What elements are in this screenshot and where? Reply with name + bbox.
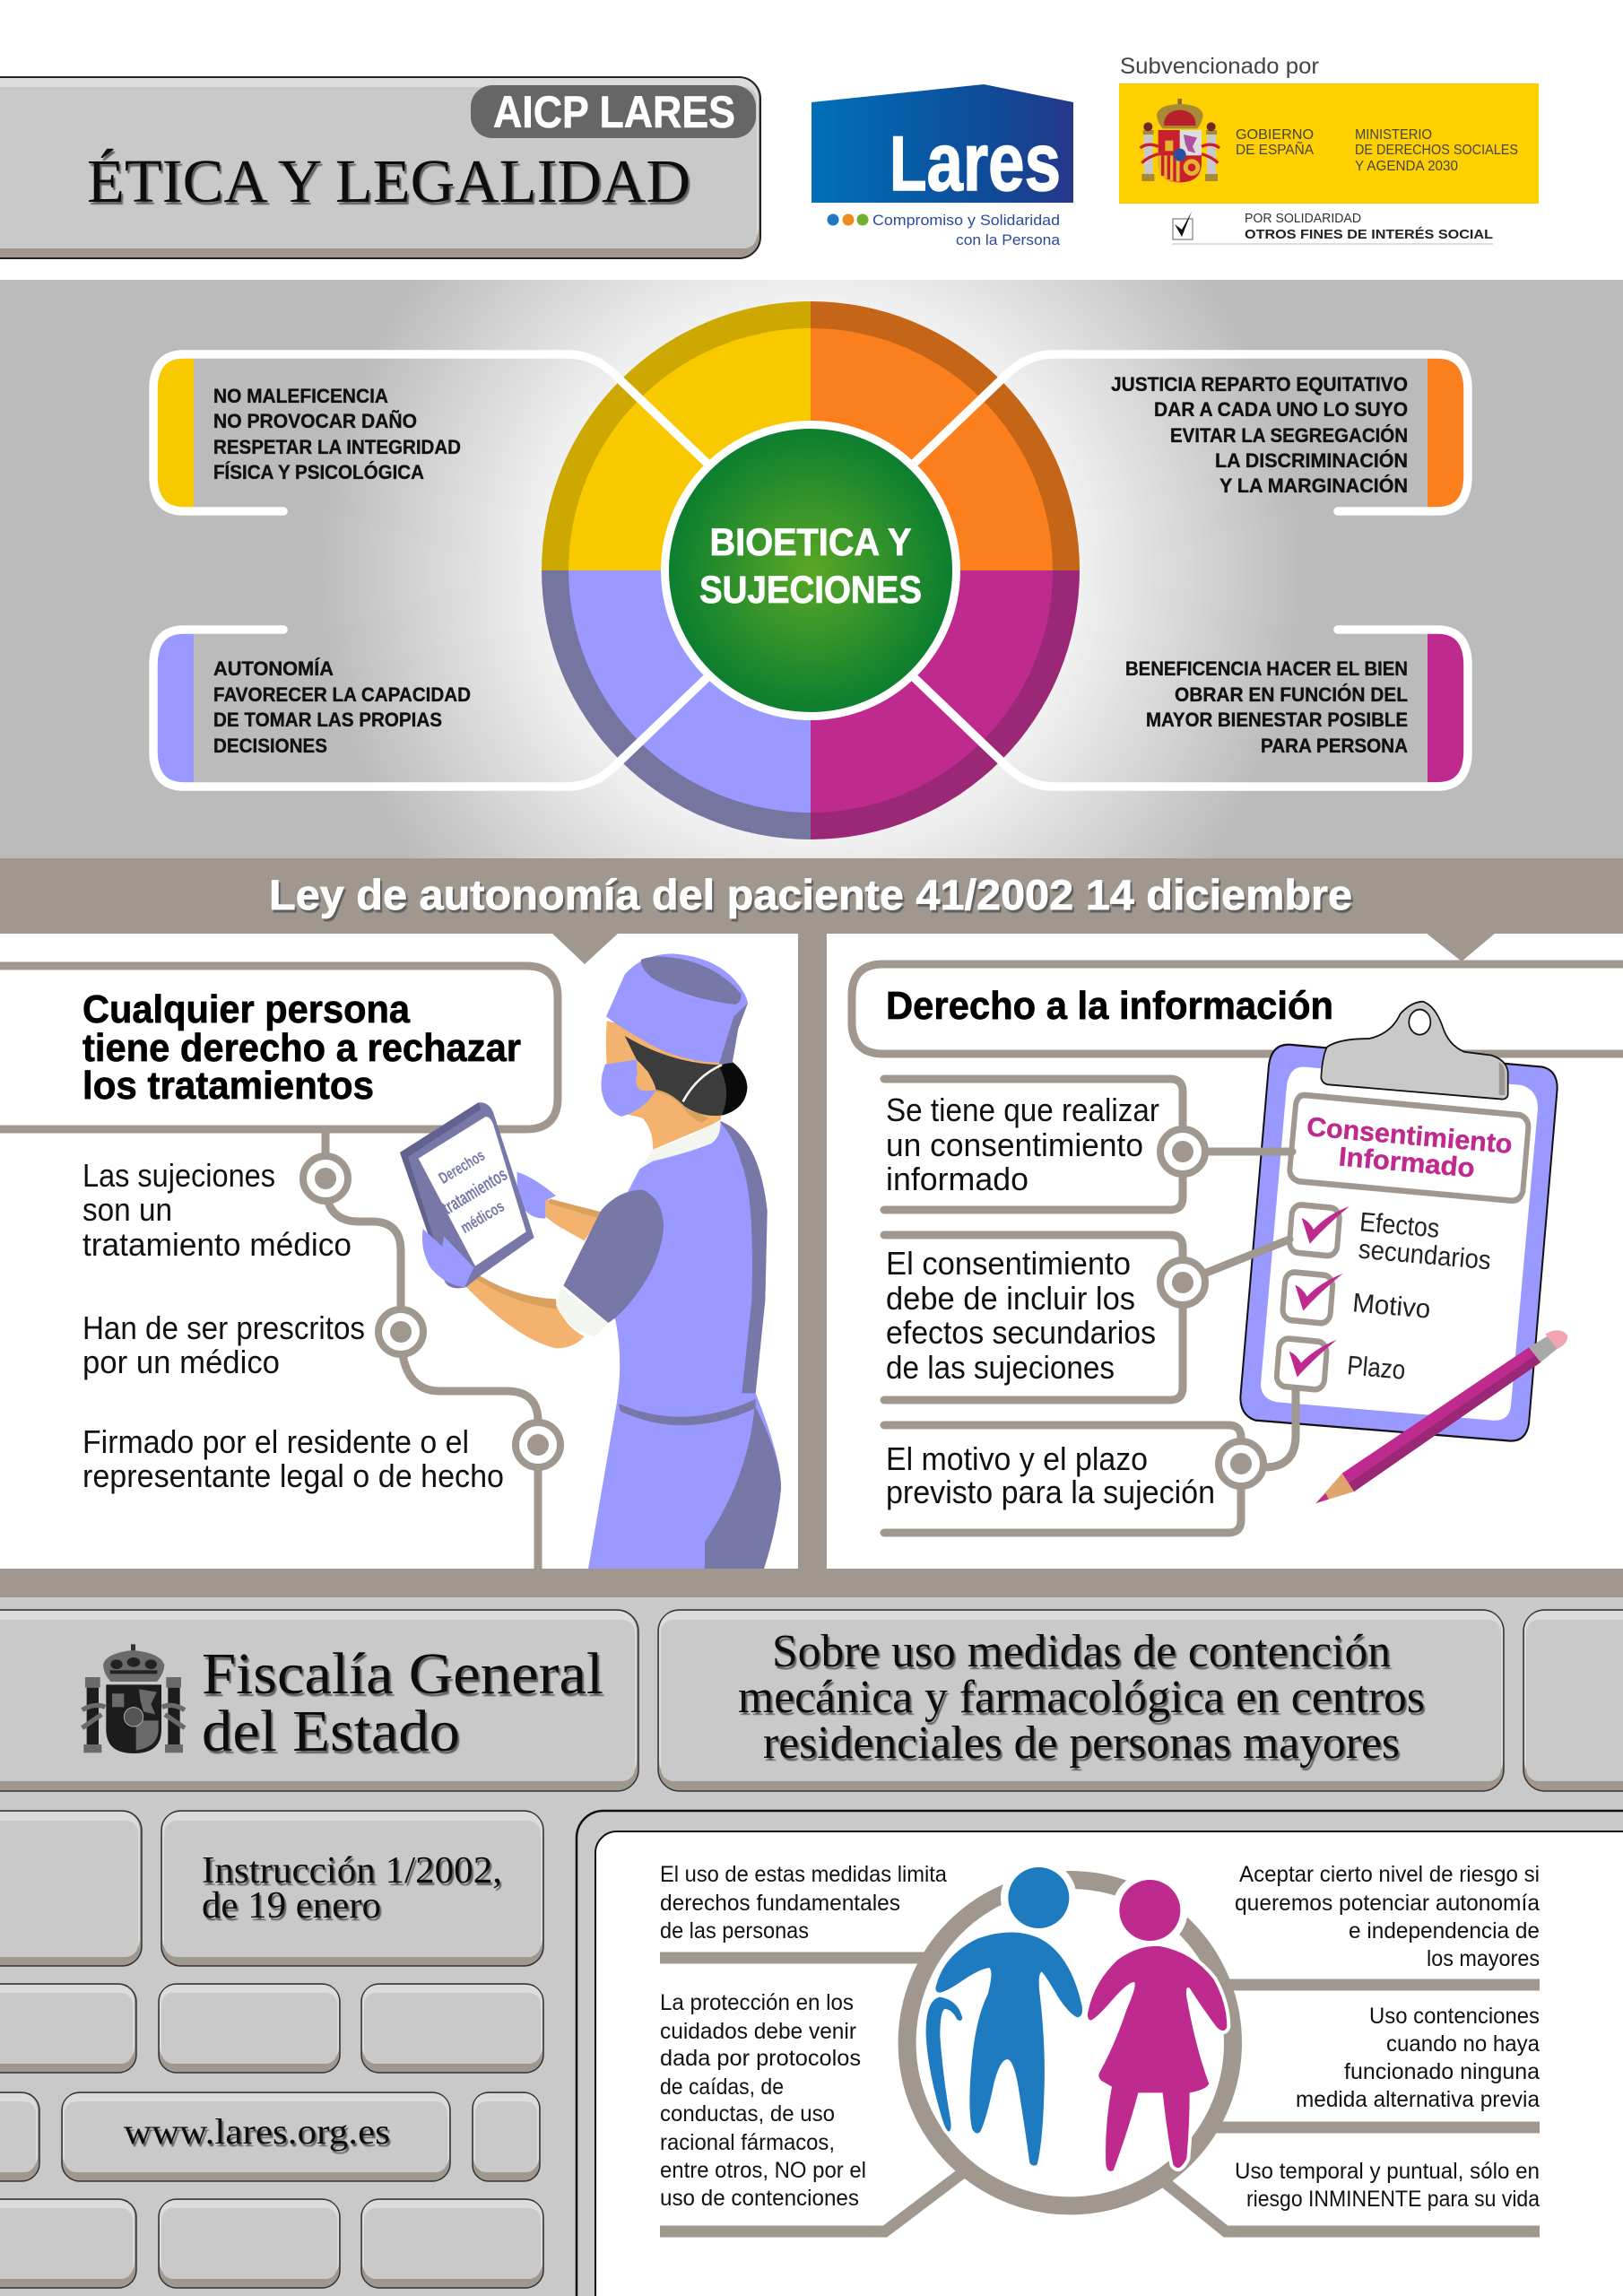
text: proteccion: entre otros, NO por el <box>660 2158 866 2183</box>
text: efectos secundarios: efectos secundarios <box>886 1314 1156 1351</box>
text: autonomia <box>213 657 471 757</box>
connector timeline <box>325 1129 538 1569</box>
logo: Lares: con la Persona <box>956 231 1061 248</box>
tablet caption <box>436 1146 511 1237</box>
text: efectos secundarios <box>886 1245 1156 1386</box>
text: proteccion: uso de contenciones <box>660 2186 859 2211</box>
fiscalia text: del Estado <box>202 1699 460 1764</box>
key text: Sobre uso medidas de contención <box>772 1626 1391 1677</box>
text: uso temporal <box>1235 2159 1540 2212</box>
banner: ley de autonomia: Ley de autonomía del paciente 41/2002 14 diciembre <box>269 871 1352 918</box>
text: firmado: Firmado por el residente o el <box>82 1423 469 1460</box>
instruccion text: de 19 enero <box>202 1885 381 1926</box>
text: proteccion: de caídas, de <box>660 2074 784 2100</box>
text: justicia: Y LA MARGINACIÓN <box>1219 474 1408 497</box>
text: proteccion <box>660 1990 866 2211</box>
panel: elderly care <box>577 1811 1623 2296</box>
text: uso contenciones: funcionado ninguna <box>1344 2059 1540 2084</box>
panel: rechazar tratamientos <box>0 953 781 1569</box>
header: title plate <box>0 77 760 258</box>
text: firmado <box>82 1423 504 1494</box>
text: no maleficencia: NO PROVOCAR DAÑO <box>213 410 417 432</box>
centre circle: BIOETICA Y <box>710 521 911 564</box>
text: uso temporal: riesgo INMINENTE para su vida <box>1246 2187 1540 2212</box>
text: efectos secundarios: debe de incluir los <box>886 1280 1135 1317</box>
tablet caption: médicos <box>457 1197 508 1237</box>
subsidy logo block: Subvencionado por <box>1120 54 1319 79</box>
subsidy logo block <box>1119 54 1539 245</box>
text: consentimiento <box>886 1091 1159 1197</box>
text: autonomia: DE TOMAR LAS PROPIAS <box>213 709 442 731</box>
text: uso contenciones: Uso contenciones <box>1369 2004 1540 2029</box>
text: proteccion: dada por protocolos <box>660 2046 861 2071</box>
heading box <box>852 964 1623 1054</box>
text: proteccion: cuidados debe venir <box>660 2019 856 2044</box>
text: no maleficencia: FÍSICA Y PSICOLÓGICA <box>213 461 424 483</box>
text: derechos fundamentales: derechos fundamentales <box>660 1891 900 1916</box>
fiscalia text <box>202 1641 603 1764</box>
figures: older couple <box>926 1867 1227 2171</box>
clipboard labels: Consentimiento <box>1306 1112 1514 1160</box>
instruccion text: Instrucción 1/2002, <box>202 1850 502 1892</box>
node 1 <box>303 1156 348 1201</box>
text: sujeciones: son un <box>82 1191 172 1228</box>
text: uso contenciones: cuando no haya <box>1386 2031 1540 2057</box>
text: justicia: EVITAR LA SEGREGACIÓN <box>1170 424 1408 447</box>
clipboard labels: Motivo <box>1351 1288 1432 1325</box>
text: proteccion: racional fármacos, <box>660 2130 835 2155</box>
keys: row 4 with website <box>0 2092 540 2181</box>
leader bars <box>660 1958 1540 2231</box>
clipboard labels: Efectos <box>1358 1207 1441 1244</box>
text: prescritos: por un médico <box>82 1344 280 1380</box>
text: consentimiento: un consentimiento <box>886 1126 1143 1163</box>
text: no maleficencia <box>213 385 461 483</box>
heading text: Cualquier persona <box>82 987 410 1031</box>
clipboard <box>1240 1002 1558 1441</box>
white bracket connectors <box>153 354 1468 787</box>
text: autonomia: DECISIONES <box>213 735 327 757</box>
logo: Lares <box>812 84 1073 248</box>
subsidy logo block: DE ESPAÑA <box>1236 143 1315 158</box>
key: sobre uso medidas <box>658 1610 1504 1791</box>
banner: ley de autonomia <box>0 858 1623 964</box>
instruccion text <box>202 1850 502 1926</box>
text: consentimiento: informado <box>886 1161 1028 1197</box>
heading text: los tratamientos <box>82 1064 374 1108</box>
tablet caption: Derechos <box>436 1146 488 1187</box>
text: firmado: representante legal o de hecho <box>82 1457 504 1494</box>
subsidy logo block: OTROS FINES DE INTERÉS SOCIAL <box>1245 227 1493 242</box>
key: blank row 2 left <box>0 1811 142 1966</box>
badge: AICP LARES: AICP LARES <box>493 87 735 137</box>
text: beneficencia: PARA PERSONA <box>1261 735 1408 757</box>
subsidy logo block: DE DERECHOS SOCIALES <box>1355 143 1518 158</box>
subsidy logo block: Y AGENDA 2030 <box>1355 159 1458 174</box>
clipboard labels: Informado <box>1338 1142 1476 1184</box>
text: motivo y plazo: El motivo y el plazo <box>886 1440 1148 1477</box>
text: aceptar riesgo: queremos potenciar autonomía <box>1235 1891 1540 1916</box>
key text <box>738 1626 1425 1769</box>
panel: derecho a la informacion <box>852 964 1623 1533</box>
text: uso contenciones: medida alternativa previa <box>1296 2087 1540 2112</box>
text: sujeciones: tratamiento médico <box>82 1226 352 1263</box>
text: prescritos <box>82 1309 365 1380</box>
middle frame bars <box>0 933 1623 1597</box>
heading text <box>82 987 521 1108</box>
text: aceptar riesgo: Aceptar cierto nivel de riesgo si <box>1239 1862 1540 1887</box>
coloured tabs <box>156 359 1465 782</box>
text: beneficencia <box>1125 657 1408 757</box>
subsidy logo block: POR SOLIDARIDAD <box>1245 212 1361 226</box>
illustration: nurse with tablet <box>400 953 781 1569</box>
clipboard labels: secundarios <box>1358 1235 1492 1275</box>
chart: four-colour wheel <box>542 301 1080 839</box>
text: derechos fundamentales: de las personas <box>660 1918 809 1944</box>
brackets <box>884 1079 1241 1533</box>
tablet caption: tratamientos <box>438 1164 511 1219</box>
heading box <box>0 966 558 1129</box>
website text: www.lares.org.es <box>124 2111 390 2152</box>
figure: man with cane <box>926 1867 1082 2166</box>
key text: mecánica y farmacológica en centros <box>738 1672 1425 1723</box>
nodes <box>1160 1129 1263 1486</box>
text: consentimiento: Se tiene que realizar <box>886 1091 1159 1128</box>
text: derechos fundamentales <box>660 1862 947 1944</box>
key text: residenciales de personas mayores <box>763 1718 1400 1769</box>
connector lines <box>1183 1152 1296 1467</box>
text: aceptar riesgo: e independencia de <box>1349 1918 1540 1944</box>
icon: coat of arms <box>1141 99 1219 182</box>
text: proteccion: La protección en los <box>660 1990 854 2015</box>
clipboard labels: Plazo <box>1346 1351 1407 1386</box>
title text: ÉTICA Y LEGALIDAD <box>87 147 690 215</box>
text: justicia: JUSTICIA REPARTO EQUITATIVO <box>1111 373 1408 396</box>
text: beneficencia: MAYOR BIENESTAR POSIBLE <box>1146 709 1408 731</box>
text: uso contenciones <box>1296 2004 1540 2112</box>
keys: row 3 <box>0 1984 543 2073</box>
panel: bioetica y sujeciones <box>0 280 1623 858</box>
text: beneficencia: BENEFICENCIA HACER EL BIEN <box>1125 657 1408 680</box>
text: aceptar riesgo: los mayores <box>1427 1946 1540 1971</box>
text: justicia <box>1111 373 1408 497</box>
icon: pencil <box>1315 1330 1567 1503</box>
text: sujeciones <box>82 1157 352 1263</box>
heading text: tiene derecho a rechazar <box>82 1026 521 1070</box>
text: autonomia: FAVORECER LA CAPACIDAD <box>213 683 471 706</box>
subsidy logo block: GOBIERNO <box>1236 127 1314 143</box>
text: autonomia: AUTONOMÍA <box>213 657 334 680</box>
key: fiscalia general <box>0 1610 638 1791</box>
text: aceptar riesgo <box>1235 1862 1540 1971</box>
keyboard background <box>0 1597 1623 2296</box>
heading text: Derecho a la información <box>886 984 1333 1028</box>
text: proteccion: conductas, de uso <box>660 2101 835 2126</box>
centre circle <box>661 421 960 720</box>
key: blank right <box>1523 1610 1623 1791</box>
logo: Lares: Compromiso y Solidaridad <box>872 212 1060 229</box>
text: prescritos: Han de ser prescritos <box>82 1309 365 1346</box>
text: motivo y plazo: previsto para la sujeción <box>886 1474 1215 1510</box>
logo: Lares: Lares <box>890 117 1061 208</box>
icon: state emblem <box>82 1644 185 1753</box>
text: justicia: LA DISCRIMINACIÓN <box>1215 449 1408 472</box>
node 3 <box>516 1422 560 1467</box>
subsidy logo block: MINISTERIO <box>1355 127 1432 143</box>
key: instruccion <box>161 1811 543 1966</box>
centre circle: SUJECIONES <box>699 569 922 612</box>
text: no maleficencia: NO MALEFICENCIA <box>213 385 388 407</box>
text: efectos secundarios: El consentimiento <box>886 1245 1131 1282</box>
clipboard labels <box>1306 1112 1514 1386</box>
text: derechos fundamentales: El uso de estas medidas limita <box>660 1862 947 1887</box>
text: justicia: DAR A CADA UNO LO SUYO <box>1154 398 1408 421</box>
figure: woman <box>1088 1880 1227 2171</box>
text: uso temporal: Uso temporal y puntual, sólo en <box>1235 2159 1540 2184</box>
node 2 <box>378 1309 423 1354</box>
text: efectos secundarios: de las sujeciones <box>886 1349 1115 1386</box>
ring <box>907 1880 1233 2205</box>
text: no maleficencia: RESPETAR LA INTEGRIDAD <box>213 436 461 458</box>
keys: row 5 <box>0 2199 543 2288</box>
fiscalia text: Fiscalía General <box>202 1641 603 1707</box>
text: sujeciones: Las sujeciones <box>82 1157 275 1194</box>
text: motivo y plazo <box>886 1440 1215 1510</box>
text: beneficencia: OBRAR EN FUNCIÓN DEL <box>1175 683 1408 706</box>
